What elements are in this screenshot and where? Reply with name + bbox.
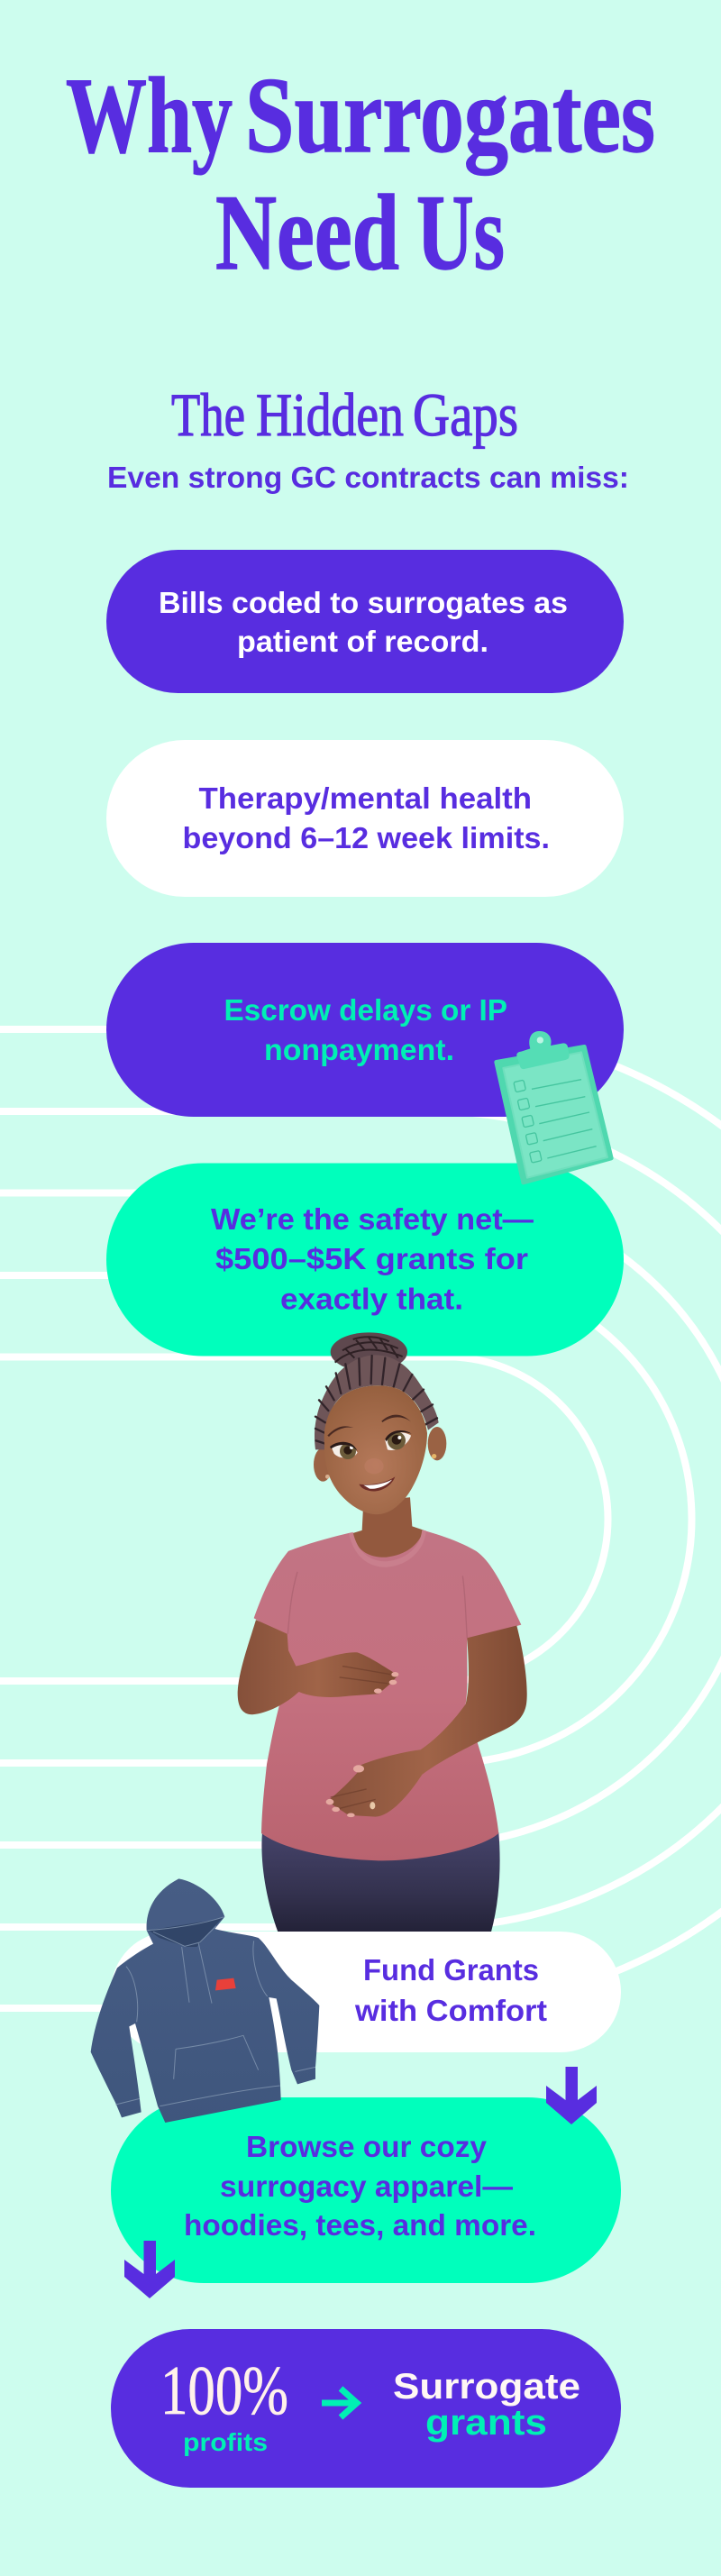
heading: The Hidden Gaps <box>171 380 518 449</box>
icon: clipboard <box>497 1031 611 1183</box>
arrow: down to profits pill <box>124 2241 175 2298</box>
pill: browse apparel: hoodies, tees, and more. <box>184 2208 536 2242</box>
pill: safety net: exactly that. <box>280 1282 463 1316</box>
pill: safety net <box>106 1163 624 1356</box>
label: profits: profits <box>183 2428 268 2456</box>
pill: therapy <box>106 740 624 897</box>
pill: escrow: nonpayment. <box>264 1033 454 1066</box>
pill: fund grants <box>111 1932 621 2052</box>
illustration: pregnant woman <box>238 1332 527 1932</box>
icon: hoodie <box>91 1878 319 2123</box>
pill: escrow <box>106 943 624 1117</box>
head <box>314 1332 446 1514</box>
subheading: Even strong GC contracts can miss: <box>107 461 629 494</box>
title: Why <box>66 55 233 175</box>
heading: The Hidden Gaps: Hidden <box>256 380 404 449</box>
pill: fund grants: Fund Grants <box>363 1953 539 1987</box>
heading: The Hidden Gaps: The <box>171 380 245 449</box>
arrow: down to browse pill <box>546 2067 597 2124</box>
stat: 100%: 100% <box>160 2352 288 2429</box>
pill: therapy: Therapy/mental health <box>198 781 532 815</box>
pill: bills coded: Bills coded to surrogates as <box>159 586 568 619</box>
pill: fund grants: with Comfort <box>354 1994 547 2027</box>
arrow: to grants <box>322 2389 357 2417</box>
pill: browse apparel <box>111 2097 621 2283</box>
concentric line background <box>0 1029 721 2008</box>
pill: therapy: beyond 6–12 week limits. <box>182 821 550 854</box>
pill: profits to grants <box>111 2329 621 2488</box>
pill: escrow: Escrow delays or IP <box>224 993 507 1027</box>
pill: bills coded <box>106 550 624 693</box>
pill: browse apparel: Browse our cozy <box>246 2130 488 2163</box>
pill: safety net: $500–$5K grants for <box>215 1242 528 1275</box>
label: Surrogate: Surrogate <box>393 2367 580 2407</box>
pill: browse apparel: surrogacy apparel— <box>220 2170 513 2203</box>
title: Us <box>416 172 505 292</box>
pill: safety net: We’re the safety net— <box>211 1202 534 1236</box>
pill: bills coded: patient of record. <box>237 625 488 658</box>
title <box>66 55 655 292</box>
label: grants: grants <box>425 2403 547 2443</box>
heading: The Hidden Gaps: Gaps <box>413 380 518 449</box>
body <box>238 1497 527 1932</box>
title: Need <box>215 172 399 292</box>
